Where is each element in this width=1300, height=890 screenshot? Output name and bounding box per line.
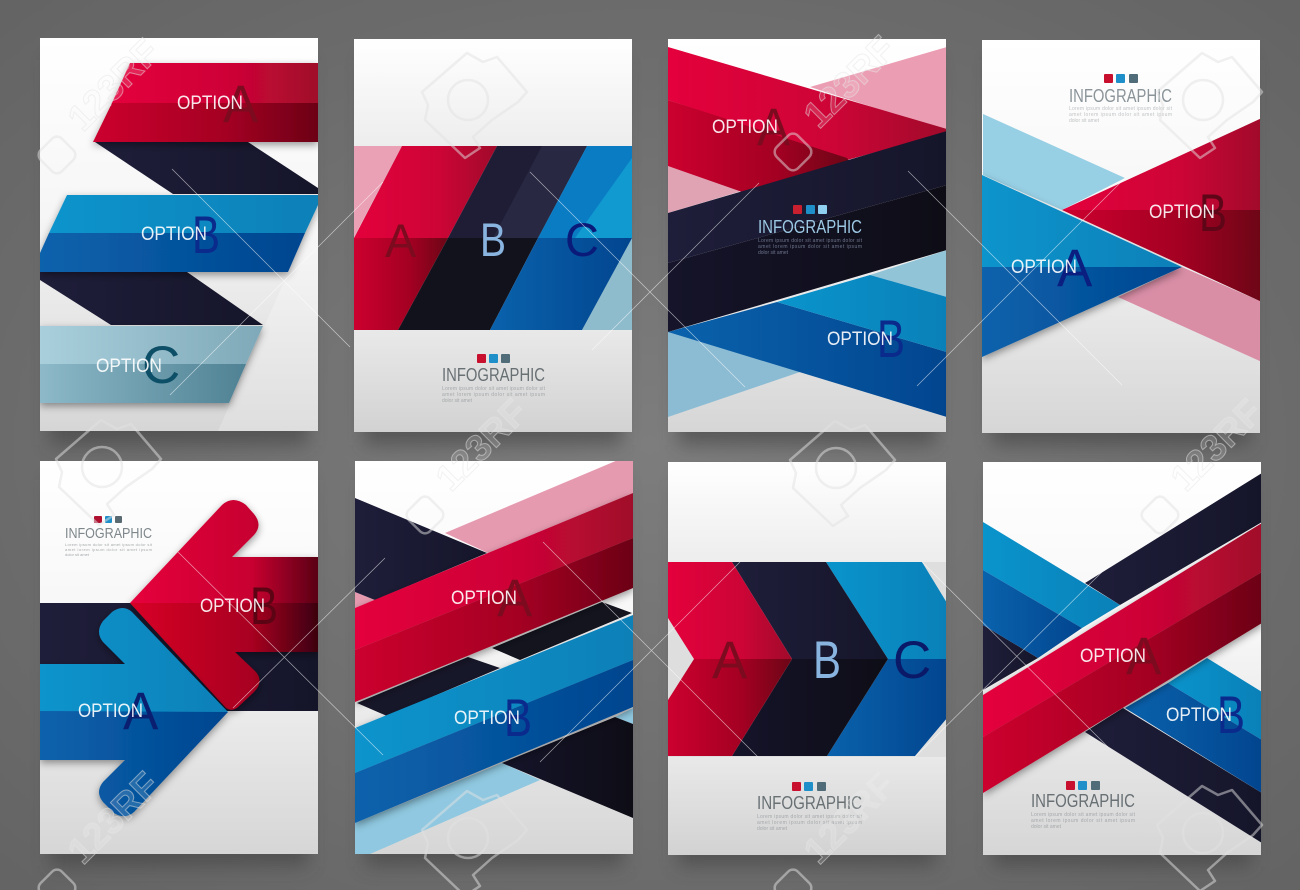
watermark text: 123RF	[60, 31, 167, 139]
option labels	[712, 98, 905, 369]
infographic caption: Lorem ipsum dolor sit amet ipsum dolor sit	[442, 386, 546, 392]
poster 3: crossing ribbons with central infographic	[668, 39, 947, 432]
infographic caption: amet lorem ipsum dolor sit amet ipsum	[1069, 112, 1172, 118]
infographic caption	[1069, 74, 1173, 124]
label option A: A	[223, 75, 259, 134]
labels: OPTION	[1166, 705, 1232, 726]
label option C	[96, 346, 178, 384]
watermark text: 123RF	[428, 391, 535, 499]
label option B	[142, 216, 218, 253]
infographic caption: Lorem ipsum dolor sit amet ipsum dolor sit	[758, 238, 863, 244]
poster 6: diagonal ribbons	[355, 460, 633, 854]
lower panel	[668, 757, 946, 855]
poster 8: X ribbons	[983, 462, 1262, 855]
ribbon A	[983, 523, 1262, 793]
watermark text: 123RF	[60, 764, 167, 872]
option labels: OPTION	[827, 329, 893, 350]
labels: OPTION	[200, 596, 265, 617]
watermark text: 123RF	[796, 764, 903, 872]
infographic caption: dolor sit amet	[1031, 824, 1062, 830]
labels: OPTION	[1011, 257, 1077, 278]
infographic caption	[442, 354, 546, 404]
label option C: OPTION	[96, 356, 162, 377]
infographic caption: Lorem ipsum dolor sit amet ipsum dolor sit	[1031, 812, 1136, 818]
chevron C	[826, 562, 947, 756]
dark band	[40, 603, 318, 711]
infographic caption: amet lorem ipsum dolor sit amet ipsum	[65, 547, 153, 552]
labels: OPTION	[1080, 646, 1146, 667]
panel A	[354, 146, 497, 330]
ribbon A	[355, 493, 633, 702]
infographic caption: INFOGRAPHIC	[758, 217, 862, 237]
infographic caption	[757, 782, 863, 832]
label option A	[178, 86, 258, 122]
infographic caption: dolor sit amet	[1069, 118, 1100, 124]
lower panel	[354, 330, 632, 432]
label option B: OPTION	[141, 224, 207, 245]
infographic caption: dolor sit amet	[757, 826, 788, 832]
labels	[78, 588, 276, 730]
infographic caption: INFOGRAPHIC	[757, 793, 862, 813]
infographic caption: amet lorem ipsum dolor sit amet ipsum	[442, 392, 545, 398]
infographic caption: Lorem ipsum dolor sit amet ipsum dolor sit	[1069, 106, 1173, 112]
ribbon B	[40, 195, 318, 272]
poster 7: chevrons A B C	[668, 462, 947, 855]
infographic caption: amet lorem ipsum dolor sit amet ipsum	[1031, 818, 1135, 824]
infographic caption: INFOGRAPHIC	[1031, 791, 1135, 811]
labels: A	[123, 682, 159, 741]
infographic caption: amet lorem ipsum dolor sit amet ipsum	[758, 244, 862, 250]
arrow A blue	[40, 608, 228, 816]
watermark text: 123RF	[796, 28, 903, 136]
letters	[712, 631, 931, 690]
labels: A	[1057, 239, 1093, 298]
panel B	[398, 146, 587, 330]
watermark text: 123RF	[1163, 391, 1270, 499]
labels: A	[497, 569, 533, 628]
labels: B	[504, 689, 532, 748]
option labels: B	[877, 310, 905, 369]
infographic caption: amet lorem ipsum dolor sit amet ipsum	[757, 820, 862, 826]
letters: C	[893, 631, 931, 690]
letters: C	[565, 213, 599, 266]
arrow B red	[130, 500, 318, 710]
labels: B	[1217, 686, 1245, 745]
central dark ribbon	[668, 131, 947, 332]
triangle B	[1062, 118, 1262, 302]
labels: B	[1199, 184, 1227, 243]
labels: A	[1126, 627, 1162, 686]
label option B: B	[192, 206, 220, 265]
infographic caption: dolor sit amet	[65, 552, 90, 557]
poster 1: three option ribbons	[40, 38, 318, 431]
infographic caption	[65, 516, 153, 557]
letters: A	[385, 214, 417, 267]
label option A: OPTION	[177, 93, 243, 114]
letters: B	[480, 213, 506, 266]
option labels: OPTION	[712, 117, 778, 138]
chevron B	[732, 562, 888, 756]
infographic caption	[758, 205, 863, 256]
labels: OPTION	[454, 708, 520, 729]
labels: OPTION	[1149, 202, 1215, 223]
ribbon A	[93, 63, 318, 142]
infographic caption	[1031, 781, 1136, 830]
poster 5: opposing arrows	[40, 461, 318, 854]
labels: OPTION	[78, 701, 143, 722]
infographic caption: INFOGRAPHIC	[1069, 86, 1172, 106]
ribbon C	[40, 326, 263, 403]
ribbon B	[983, 522, 1262, 793]
infographic caption: INFOGRAPHIC	[65, 525, 152, 542]
labels: OPTION	[451, 588, 517, 609]
infographic caption: INFOGRAPHIC	[442, 365, 545, 385]
infographic caption: dolor sit amet	[758, 250, 789, 256]
labels	[1012, 194, 1225, 286]
letters	[385, 223, 597, 257]
poster 4: crossing triangles	[982, 40, 1262, 433]
labels: B	[250, 577, 278, 636]
ribbon B	[668, 275, 947, 417]
panel C	[490, 146, 632, 330]
option labels: A	[757, 98, 791, 157]
labels	[452, 580, 532, 736]
triangle A	[982, 175, 1182, 357]
ribbon B	[355, 615, 633, 823]
letters: B	[813, 631, 841, 690]
infographic caption: dolor sit amet	[442, 398, 473, 404]
label option C: C	[142, 336, 180, 395]
chevron A	[668, 562, 792, 756]
letters: A	[712, 631, 748, 690]
ribbon A	[668, 47, 947, 193]
labels	[1080, 627, 1245, 745]
infographic caption: Lorem ipsum dolor sit amet ipsum dolor sit	[757, 814, 863, 820]
infographic caption: Lorem ipsum dolor sit amet ipsum dolor sit	[65, 542, 153, 547]
poster 2: A B C diagonal panels	[354, 39, 632, 432]
